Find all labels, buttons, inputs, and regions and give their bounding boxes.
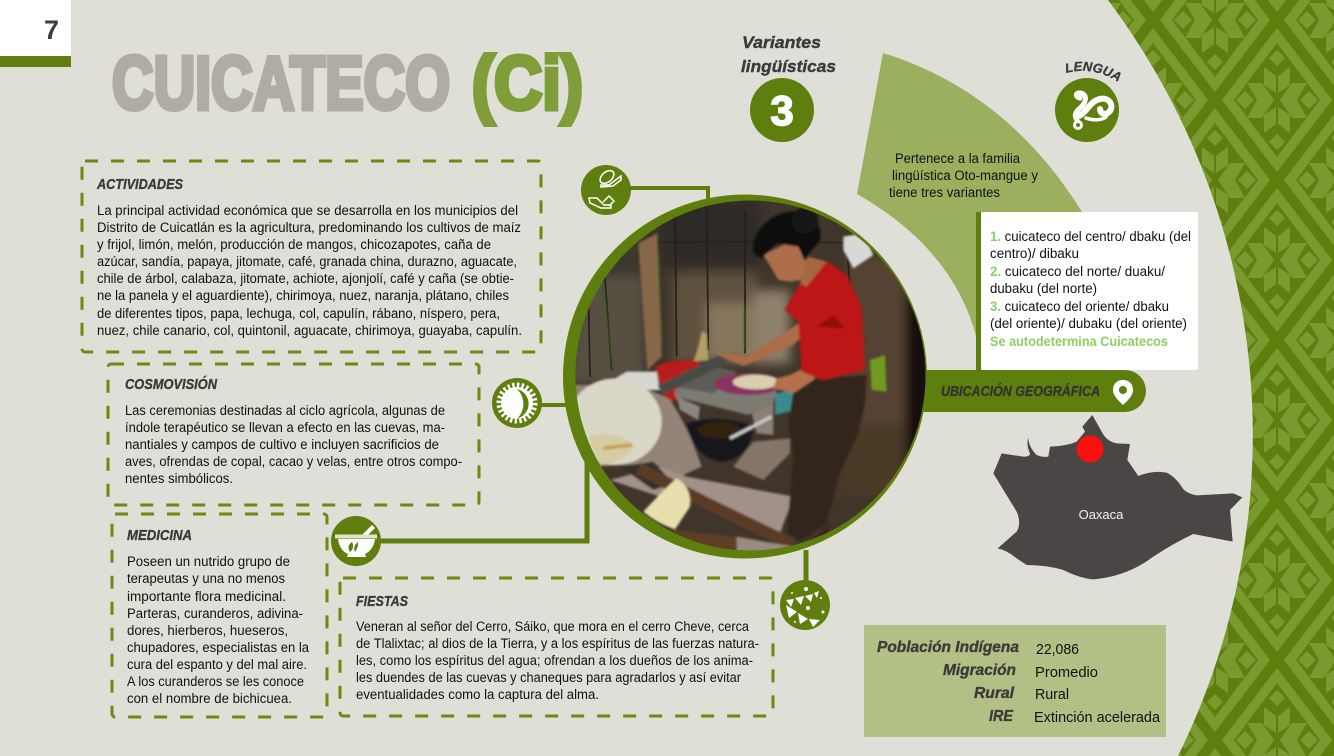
variantes linguisticas: lingüísticas [741,57,836,76]
panel: actividades: ACTIVIDADES [96,176,183,193]
panel: actividades: Distrito de Cuicatlán es la agricultura, predominando los cultivos de maíz [97,220,521,235]
data table: IRE [989,708,1014,725]
panel: medicina: MEDICINA [127,527,192,544]
panel: medicina: A los curanderos se les conoce [127,674,304,689]
panel: actividades: La principal actividad económica que se desarrolla en los municipios del [97,203,518,218]
panel: variants list: 2. cuicateco del norte/ duaku/ [990,264,1165,279]
panel: cosmovision: Las ceremonias destinadas al ciclo agrícola, algunas de [125,403,445,418]
connector: fiestas [804,550,808,585]
panel: actividades: y frijol, limón, melón, producción de mangos, chicozapotes, caña de [97,237,491,252]
panel: variants list: (del oriente)/ dubaku (del oriente) [990,316,1187,331]
panel: fiestas: FIESTAS [356,593,408,610]
panel: fiestas: eventualidades como la captura del alma. [356,687,599,702]
panel: variants list [976,212,1198,370]
woven green pattern band [1108,0,1334,756]
data table: Promedio [1035,664,1098,681]
data table: Rural [974,685,1015,702]
panel: variants list: centro)/ dibaku [990,246,1079,261]
title: CUICATECO [112,41,450,125]
panel: actividades: ne la panela y el aguardiente), chirimoya, nuez, naranja, plátano, chiles [97,288,509,303]
icon: speech scroll [1074,93,1111,128]
panel: medicina: chupadores, especialistas en la [127,640,309,655]
panel: variants list: Se autodetermina Cuicatecos [990,334,1168,349]
icon: hands with seeds [581,165,631,215]
panel: fiestas: les, como los espíritus del agua; ofrendan a los dueños de los anima- [356,653,753,668]
location marker [1076,436,1104,462]
panel: actividades: de diferentes tipos, papa, lechuga, col, capulín, rábano, níspero, pera, [97,306,500,321]
panel: cosmovision [108,364,479,505]
data table: Rural [1035,686,1069,703]
language family text: Pertenece a la familia [895,151,1020,166]
panel: variants list: 3. cuicateco del oriente/ dbaku [990,299,1169,314]
language family text: lingüística Oto-mangue y [892,168,1038,183]
panel: cosmovision: índole terapéutico se llevan a efecto en las cuevas, ma- [125,420,445,435]
location bar: UBICACIÓN GEOGRÁFICA [941,382,1100,400]
panel: fiestas: Veneran al señor del Cerro, Sáiko, que mora en el cerro Cheve, cerca [356,619,749,634]
panel: medicina: Parteras, curanderos, adivina- [127,606,303,621]
panel: medicina [112,514,327,717]
icon: sun and moon [492,378,542,428]
light green language wedge [857,53,1110,340]
panel: actividades [82,161,541,352]
map of Oaxaca [993,415,1242,579]
connector: actividades [620,188,708,204]
panel: medicina: con el nombre de bichicuea. [127,691,292,706]
panel: fiestas: les duendes de las cuevas y chaneques para agradarlos y así evitar [356,670,741,685]
data table [864,625,1166,737]
title: (Ci) [472,41,583,125]
panel: medicina: Poseen un nutrido grupo de [127,554,290,569]
panel: actividades: azúcar, sandía, papaya, jitomate, café, granada china, durazno, aguacate, [97,254,517,269]
panel: medicina: cura del espanto y del mal aire. [127,657,307,672]
panel: actividades: chile de árbol, calabaza, jitomate, achiote, ajonjolí, café y caña (se obtie- [97,271,514,286]
language family text [889,151,1038,200]
icon: map pin [1113,380,1133,405]
photo: woman making tortillas [560,190,940,560]
panel: cosmovision: nantiales y campos de cultivo e incluyen sacrificios de [125,437,439,452]
icon: mortar and pestle [331,516,381,566]
variantes linguisticas: Variantes [742,33,821,52]
lengua icon [1055,62,1121,142]
data table: Extinción acelerada [1034,709,1161,726]
panel: cosmovision: nentes simbólicos. [125,471,233,486]
connector: medicina [370,460,587,541]
lengua icon: LENGUA [1066,62,1121,82]
data table: Migración [943,662,1016,679]
page number tab: 7 [44,15,59,45]
panel: variants list: dubaku (del norte) [990,281,1097,296]
data table: Población Indígena [877,639,1019,656]
page number tab [0,0,71,67]
connector: cosmovision [535,403,572,407]
panel: medicina: dores, hierberos, hueseros, [127,623,288,638]
variantes linguisticas: 3 [770,87,794,134]
panel: cosmovision: aves, ofrendas de copal, cacao y velas, entre otros compo- [125,454,462,469]
panel: medicina: terapeutas y una no menos [127,571,285,586]
icon: party bunting [780,580,830,630]
panel: medicina: importante flora medicinal. [127,589,286,604]
panel: actividades: nuez, chile canario, col, quintonil, aguacate, chirimoya, guayaba, capulín. [97,323,522,338]
variantes linguisticas [741,33,836,142]
panel: fiestas [340,578,773,716]
panel: cosmovision: COSMOVISIÓN [125,375,218,393]
data table: 22,086 [1036,641,1079,658]
panel: fiestas: de Tlalixtac; al dios de la Tierra, y a los espíritus de las fuerzas natura- [356,636,759,651]
panel: variants list: 1. cuicateco del centro/ dbaku (del [990,229,1191,244]
language family text: tiene tres variantes [889,185,1000,200]
map of Oaxaca: Oaxaca [1079,507,1124,522]
location bar [900,370,1146,412]
